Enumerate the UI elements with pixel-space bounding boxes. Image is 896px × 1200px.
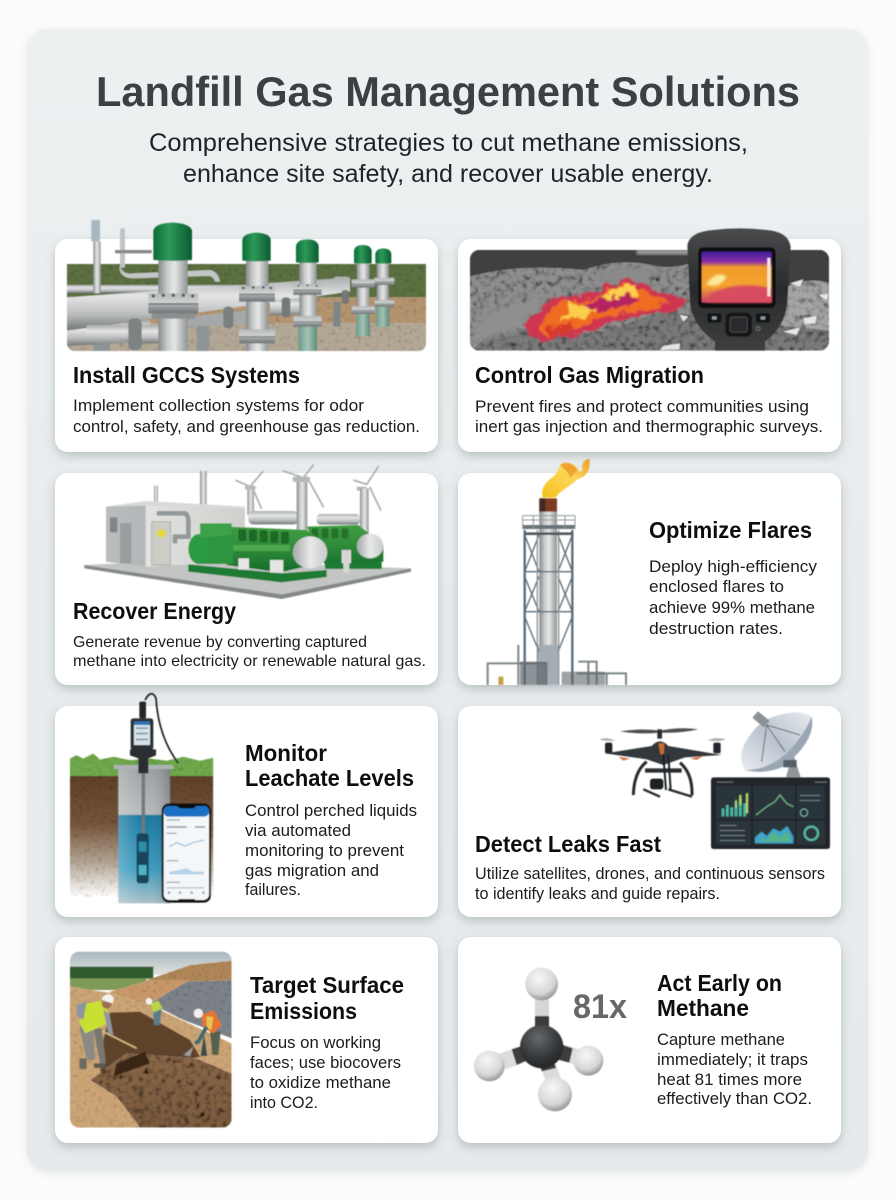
illustration: drone, satellite dish and dashboard [599,711,830,849]
illustration: gas-to-energy plant [84,465,411,599]
card heading: Leachate Levels [245,765,414,791]
card background [55,239,438,452]
card description: Focus on working [250,1034,381,1052]
card description: faces; use biocovers [250,1054,401,1072]
card description: gas migration and [245,862,379,880]
card description: to oxidize methane [250,1074,391,1092]
card description: Prevent fires and protect communities using [475,398,809,416]
panel: Detect Leaks Fast [458,706,841,917]
card description: into CO2. [250,1094,318,1112]
card description [73,397,420,436]
card description: Control perched liquids [245,802,417,820]
illustration: thermal survey of landfill [470,228,829,351]
illustration: gas wellhead pipes [67,220,426,351]
subtitle: enhance site safety, and recover usable energy. [183,160,713,188]
card heading: Target Surface [250,972,404,998]
card description: Capture methane [657,1031,785,1049]
panel: Monitor Leachate Levels [55,694,438,917]
card description: inert gas injection and thermographic surveys. [475,418,823,436]
card heading [657,970,782,1021]
illustration: methane molecule [474,968,603,1111]
card heading [245,740,414,791]
card background [55,706,438,917]
panel: Recover Energy [55,465,438,685]
card description [475,865,825,903]
card background [458,937,841,1143]
card background [55,473,438,685]
title: Landfill Gas Management Solutions [96,68,800,115]
card description: destruction rates. [649,620,783,638]
card background [458,706,841,917]
panel: Control Gas Migration [458,228,841,452]
card heading: Optimize Flares [649,517,812,543]
panel: Optimize Flares [458,459,841,685]
card description [73,634,426,670]
card heading [250,972,404,1024]
card description: methane into electricity or renewable natural gas. [73,653,426,670]
card description: Deploy high-efficiency [649,558,818,576]
card description: enclosed flares to [649,578,784,596]
panel: Act Early on Methane [458,937,841,1143]
card heading: Act Early on [657,970,782,996]
card description [245,802,417,899]
card description: monitoring to prevent [245,842,404,860]
card description [657,1031,812,1108]
card description: immediately; it traps [657,1051,808,1069]
card description: effectively than CO2. [657,1090,812,1108]
card description: achieve 99% methane [649,599,815,617]
card description: via automated [245,822,351,840]
panel: Target Surface Emissions [55,937,438,1143]
illustration: workers spreading biocover [70,952,232,1128]
subtitle: Comprehensive strategies to cut methane emissions, [149,129,748,157]
card description [649,558,818,638]
card description: to identify leaks and guide repairs. [475,885,720,903]
card description [475,398,823,436]
card description: Utilize satellites, drones, and continuous sensors [475,865,825,883]
panel: Install GCCS Systems [55,220,438,452]
illustration: enclosed flare tower [488,459,626,685]
card description: failures. [245,881,301,899]
card description: heat 81 times more [657,1071,802,1089]
card description [250,1034,401,1112]
card background [458,239,841,452]
card heading: Emissions [250,998,357,1024]
subtitle [149,129,748,188]
card heading: Detect Leaks Fast [475,831,661,857]
card heading: Methane [657,995,749,1021]
card description: Generate revenue by converting captured [73,634,367,651]
card background [55,937,438,1143]
card heading: Control Gas Migration [475,362,704,388]
statistic: 81x: 81x [573,988,627,1026]
card background [458,473,841,685]
card heading: Recover Energy [73,598,236,624]
card heading: Install GCCS Systems [73,362,300,388]
card heading: Monitor [245,740,327,766]
card description: Implement collection systems for odor [73,397,365,415]
illustration: leachate well and phone [70,694,213,903]
card description: control, safety, and greenhouse gas reduction. [73,418,420,436]
